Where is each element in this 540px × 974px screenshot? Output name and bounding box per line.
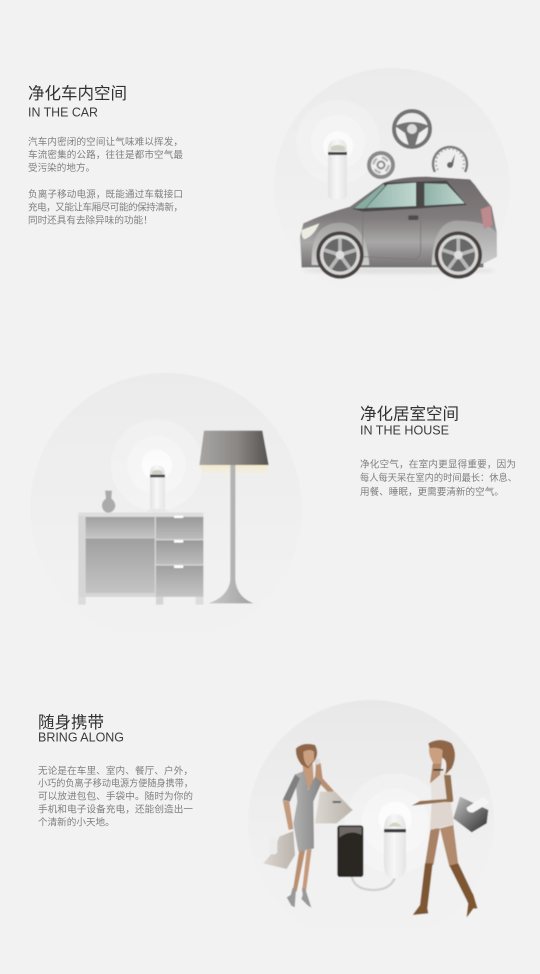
front window [366,183,416,208]
dress [293,771,322,852]
legs [293,850,305,892]
icon: air purifier (house) [147,465,168,513]
heading: bring along: 随身携带 [38,714,104,732]
boots [413,863,433,915]
rear wheel [435,231,482,279]
subheading: house: IN THE HOUSE [360,424,449,438]
body text: car paragraph 1: 车流密集的公路，往往是都市空气最 [28,149,183,161]
body text: bring along: 手机和电子设备充电，还能创造出一 [38,804,193,816]
body text: bring along: 个清新的小天地。 [38,816,115,828]
body text: bring along: 无论是在车里、室内、餐厅、户外， [38,765,193,777]
heading: house: 净化居室空间 [360,406,459,424]
subheading: car: IN THE CAR [28,106,98,120]
panel: in the car text [28,85,183,226]
drawer 2 [156,540,203,564]
ground shadow [302,267,495,274]
front wheel [316,231,364,279]
shelf panel [86,517,155,538]
background circle: bring along [248,700,494,946]
legs [425,828,440,865]
desk [78,513,203,605]
car [300,177,497,279]
open cabinet [86,538,155,593]
hair and face [296,744,317,768]
icon: air purifier (bring along) [384,814,406,878]
glow rings: bring along [345,773,445,873]
body text: car paragraph 2: 充电，又能让车厢尽可能的保持清新， [28,202,183,214]
background circle: car [274,68,510,304]
icon: smartphone [337,825,363,877]
icon: steering wheel [394,111,430,147]
panel: in the car illustration [274,68,510,304]
panel: bring along illustration [248,700,494,946]
floor lamp [199,431,269,603]
shoes [287,888,296,907]
skirt [430,801,454,830]
body text: car paragraph 1: 汽车内密闭的空间让气味难以挥发， [28,136,183,148]
icon: speedometer [433,147,467,172]
desk carcass [78,513,203,597]
body text: car paragraph 2 [28,188,183,226]
glow rings: house [111,419,203,511]
body text: bring along: 可以放进包包、手袋中。随时为你的 [38,790,193,802]
neck [430,763,442,783]
window frame [353,181,467,212]
drawer 1 [156,517,203,539]
rear window [424,183,465,206]
door seam [363,208,421,259]
body text: car paragraph 1 [28,136,183,174]
lamp shade [199,431,269,465]
woman on phone [263,744,353,908]
lamp pole and base [208,465,253,603]
face [429,748,443,763]
handbag [453,797,488,832]
charging cable [352,877,395,890]
left sleeve and arm [283,774,300,802]
glow rings: car [296,100,380,184]
heading: car: 净化车内空间 [28,85,127,103]
body text: car paragraph 1: 受污染的地方。 [28,162,95,174]
lamp light glow [199,465,268,476]
body text: house [360,458,517,498]
body text: house: 每人每天呆在室内的时间最长：休息、 [360,472,517,484]
icon: alloy wheel [369,153,393,177]
lower bags [263,831,295,869]
woman with handbag [412,740,490,917]
ponytail and hair [428,740,455,775]
belt [431,800,453,802]
car body [300,177,497,267]
body text: bring along [38,765,193,828]
panel: bring along text [38,714,193,828]
neck and raised arm [303,763,314,790]
windshield [354,184,385,208]
body text: car paragraph 2: 同时还具有去除异味的功能！ [28,214,153,226]
upper bags [315,792,353,823]
subheading: bring along: BRING ALONG [38,730,124,744]
panel: in the house illustration [30,373,302,645]
headlight [302,223,319,239]
desk top [78,513,203,516]
background circle: house [30,373,302,645]
body text: house: 净化空气，在室内更显得重要，因为 [360,458,516,470]
bottle in bag [467,797,490,812]
wheel arches [312,223,369,265]
body text: car paragraph 2: 负离子移动电源，既能通过车载接口 [28,188,183,200]
panel: in the house text [360,406,517,498]
icon: vase [102,491,115,513]
body text: bring along: 小巧的负离子移动电源方便随身携带， [38,778,193,790]
drawer 3 [156,566,203,597]
desk feet [78,597,86,605]
arm [412,775,453,806]
body text: house: 用餐、睡眠，更需要清新的空气。 [360,486,504,498]
icon: air purifier (car) [328,139,347,199]
tail light [481,205,493,229]
torso [431,770,453,802]
